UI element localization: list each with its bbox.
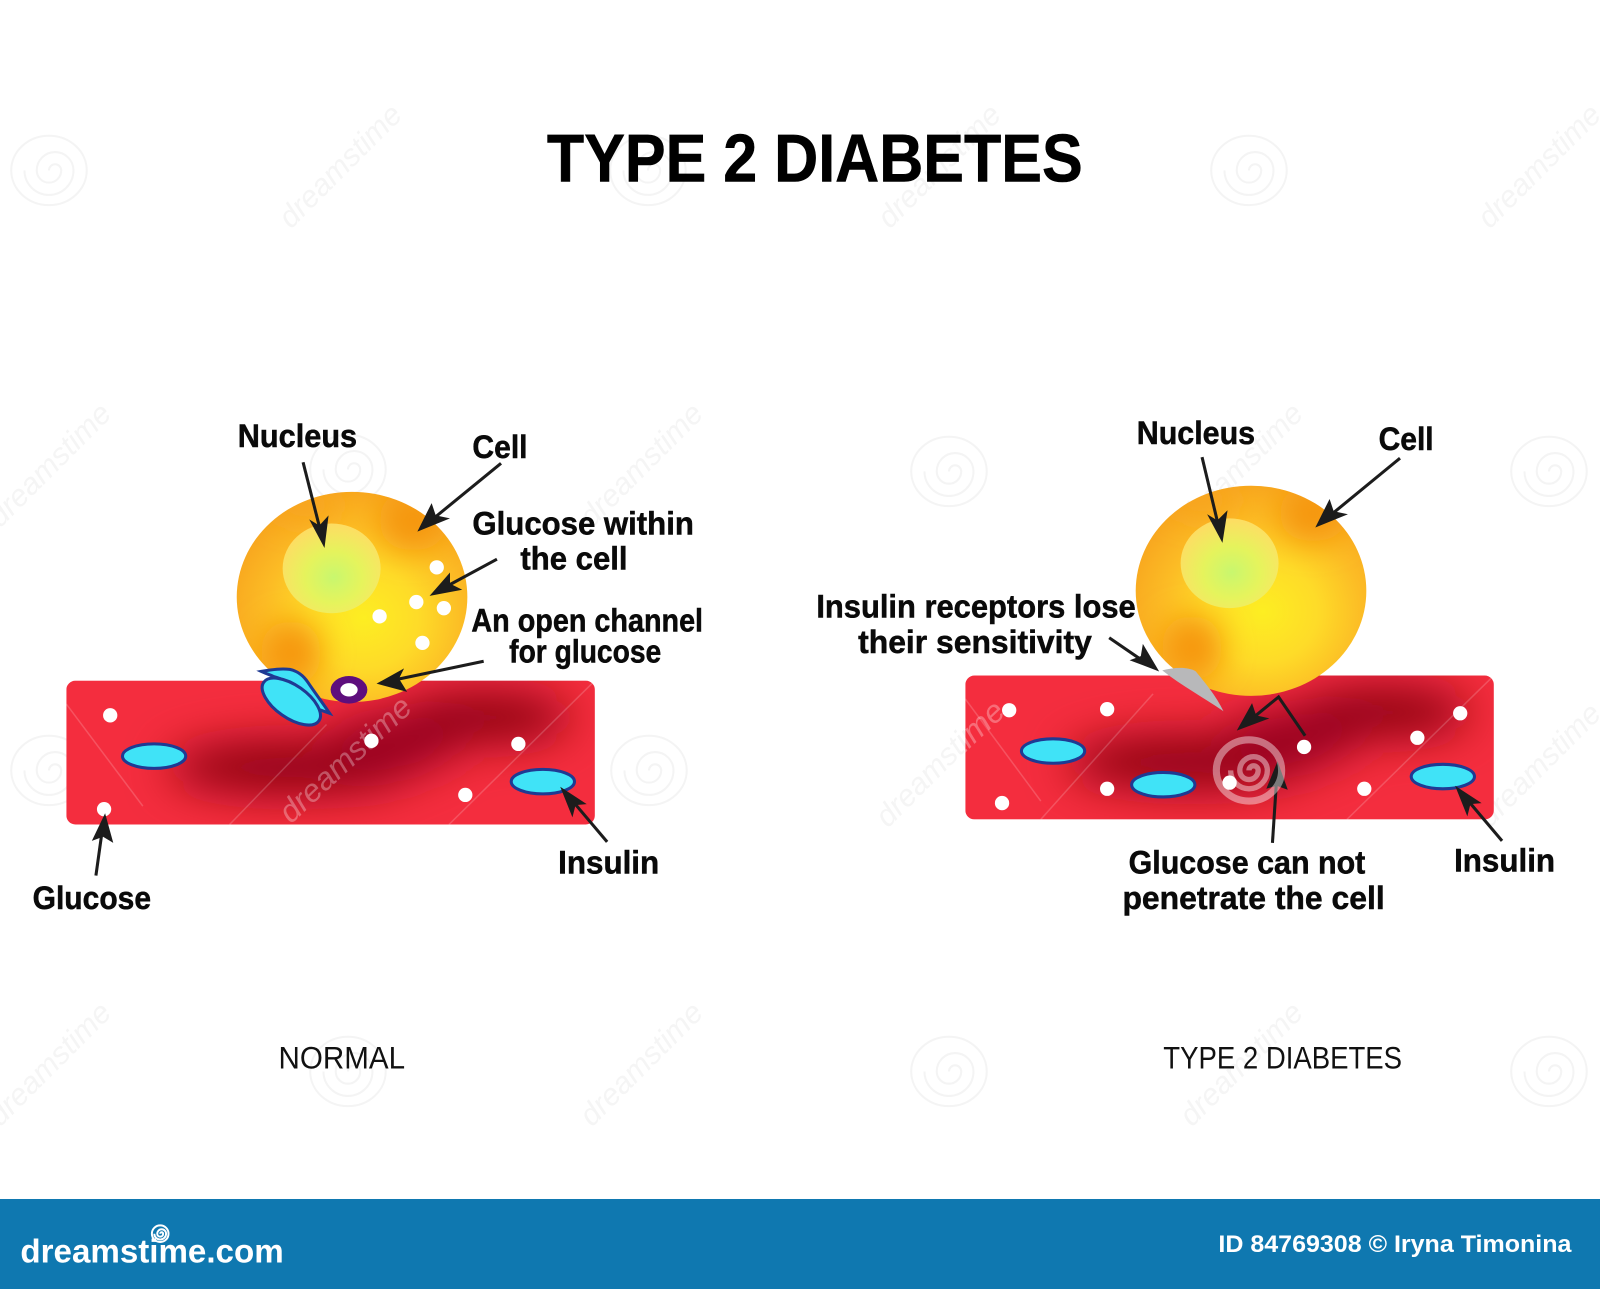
- panel: normal: [33, 417, 703, 1075]
- label: insulin: Insulin: [1454, 841, 1555, 878]
- label: open channel: [471, 602, 703, 669]
- arrow: glucose within the cell: [430, 559, 497, 596]
- watermark pattern: dreamstime: [272, 97, 409, 235]
- arrow: insulin: [560, 787, 607, 842]
- cell: normal: [237, 490, 467, 702]
- label: glucose within the cell: the cell: [520, 539, 628, 576]
- arrow: cell: [417, 463, 501, 532]
- watermark pattern: dreamstime: [1173, 396, 1310, 534]
- arrow: insulin: [1455, 786, 1502, 841]
- arrow: nucleus: [1202, 457, 1228, 543]
- insulin molecules: [122, 744, 574, 794]
- watermark pattern: dreamstime: [1173, 995, 1310, 1133]
- footer logo: dreamstime.com: [20, 1233, 284, 1270]
- label: glucose can not penetrate: Glucose can not: [1129, 843, 1365, 880]
- insulin receptor: [254, 669, 330, 734]
- glucose inside the cell: [372, 560, 451, 650]
- label: cell: Cell: [1379, 420, 1434, 457]
- watermark spiral on vessel: [1216, 740, 1282, 801]
- insulin molecules: [1021, 739, 1474, 797]
- forked arrow: glucose blocked: [1237, 697, 1305, 736]
- label: glucose within the cell: [472, 505, 694, 576]
- panel: type 2 diabetes: [816, 414, 1555, 1075]
- watermark pattern: dreamstime: [573, 995, 710, 1133]
- label: glucose can not penetrate: penetrate the cell: [1122, 879, 1385, 916]
- arrow: insulin receptors: [1109, 638, 1159, 671]
- desensitised insulin receptor: [1162, 668, 1223, 711]
- label: insulin: Insulin: [558, 843, 659, 880]
- label: insulin receptors: [816, 587, 1136, 660]
- footer credit: ID 84769308 © Iryna Timonina: [1218, 1231, 1572, 1258]
- footer bar: [0, 1199, 1600, 1289]
- glucose in the bloodstream: [995, 702, 1467, 810]
- nucleus: normal: [283, 523, 381, 613]
- glucose in the bloodstream: [97, 708, 526, 816]
- arrow: glucose: [92, 813, 113, 876]
- watermark pattern: dreamstime: [871, 97, 1008, 235]
- blood vessel: diabetes: dreamstime: [864, 693, 1012, 834]
- watermark pattern: dreamstime: [573, 396, 710, 534]
- label: open channel: An open channel: [471, 602, 703, 639]
- caption: type 2 diabetes: TYPE 2 DIABETES: [1163, 1039, 1402, 1075]
- title: TYPE 2 DIABETES: [547, 122, 1083, 197]
- cell: diabetes: [1136, 485, 1366, 696]
- label: glucose: Glucose: [33, 879, 151, 916]
- label: insulin receptors: their sensitivity: [858, 623, 1092, 660]
- label: cell: Cell: [472, 428, 528, 465]
- nucleus: diabetes: [1181, 518, 1279, 608]
- caption: normal: NORMAL: [279, 1039, 405, 1075]
- watermark pattern: dreamstime: [869, 696, 1006, 834]
- label: glucose can not penetrate: [1122, 843, 1385, 916]
- open glucose channel: [331, 676, 367, 704]
- arrow: nucleus: [303, 462, 329, 548]
- label: nucleus: Nucleus: [238, 417, 357, 454]
- arrow: cell: [1315, 458, 1400, 528]
- blood vessel: diabetes: [965, 676, 1494, 820]
- label: nucleus: Nucleus: [1137, 414, 1255, 451]
- blood vessel: normal: dreamstime: [271, 688, 419, 830]
- label: glucose within the cell: Glucose within: [472, 505, 694, 542]
- arrow: open channel: [377, 661, 484, 692]
- arrow: glucose can not penetrate: [1266, 761, 1288, 843]
- label: insulin receptors: Insulin receptors lose: [816, 587, 1136, 624]
- label: open channel: for glucose: [509, 632, 661, 669]
- blood vessel: normal: [66, 681, 595, 830]
